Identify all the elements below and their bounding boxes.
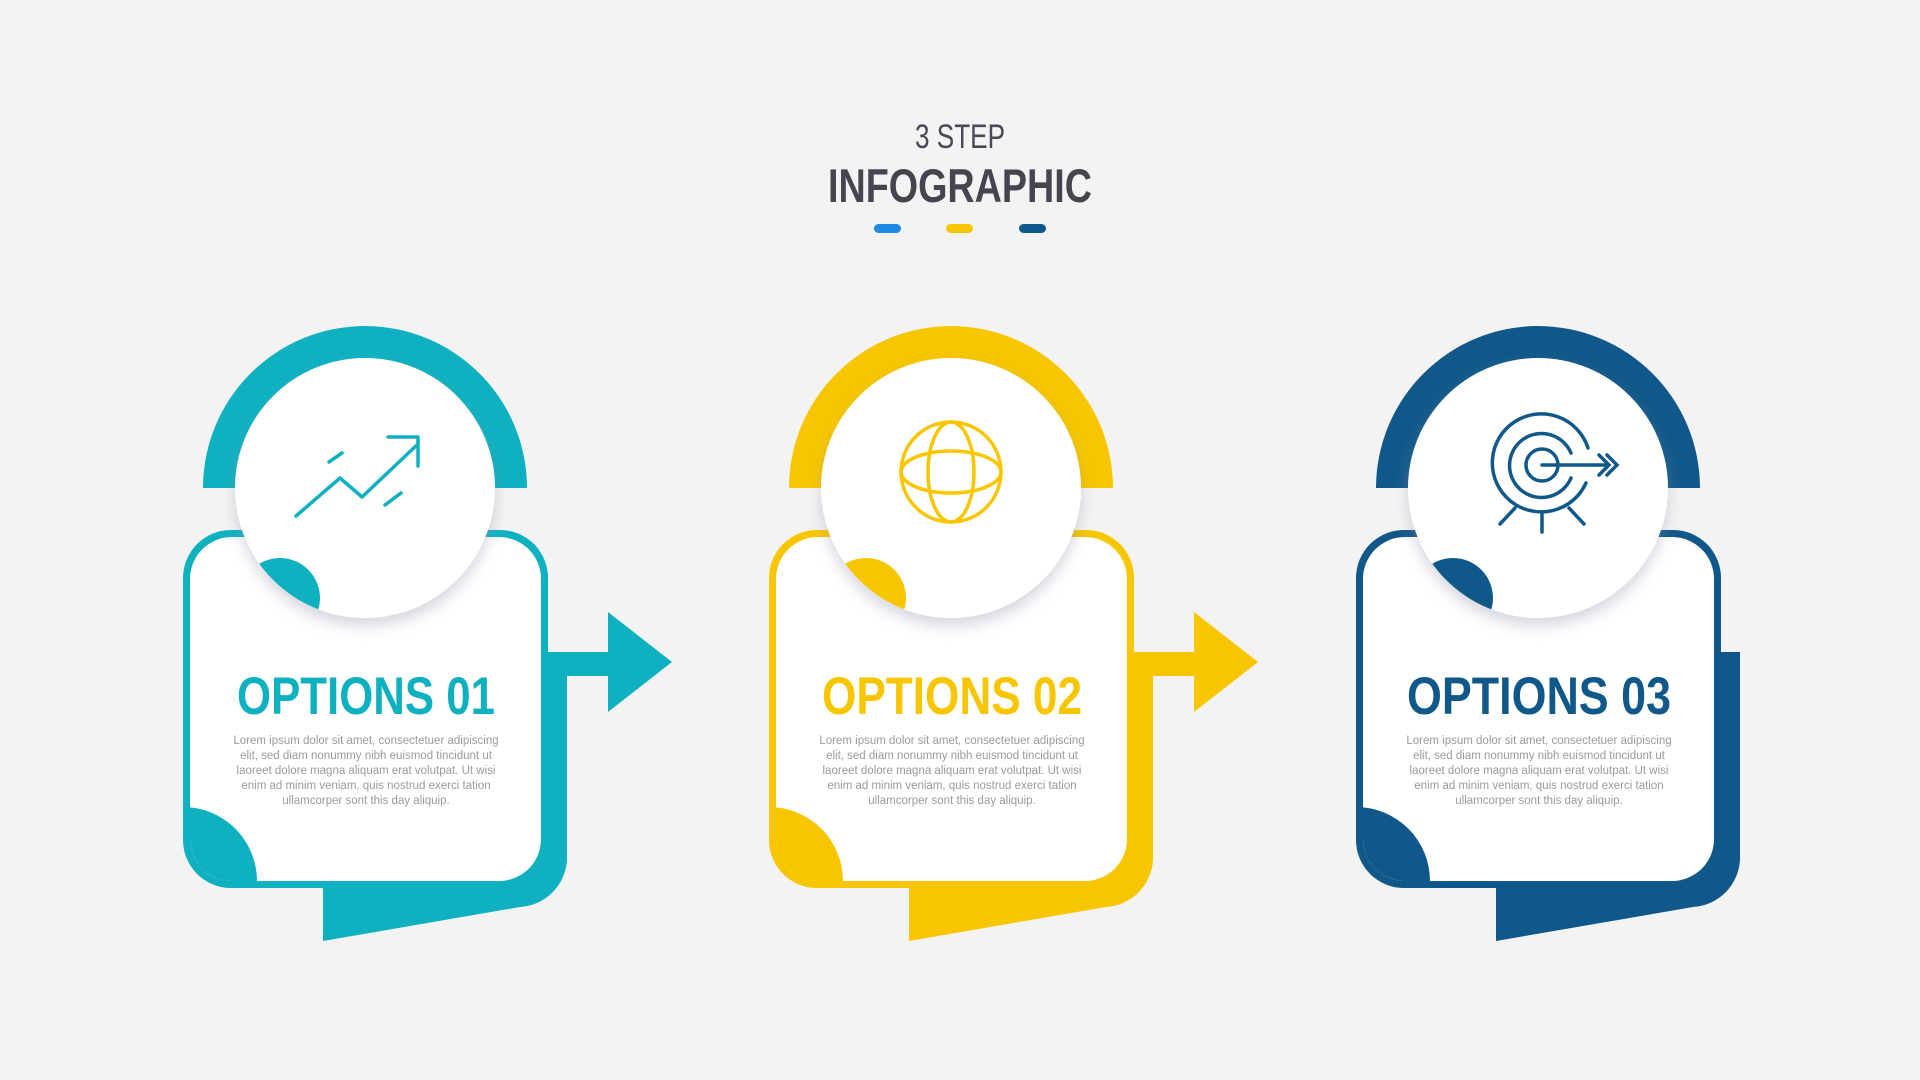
title (828, 118, 1092, 212)
text block: Lorem ipsum dolor sit amet, consectetuer adipiscing (1406, 735, 1672, 747)
arrow (540, 612, 672, 712)
text block: Lorem ipsum dolor sit amet, consectetuer adipiscing (233, 735, 499, 747)
text block: ullamcorper sont this day aliquip. (868, 795, 1036, 807)
title: INFOGRAPHIC (828, 159, 1092, 212)
text block: ullamcorper sont this day aliquip. (282, 795, 450, 807)
title dashes (874, 224, 1046, 233)
text block: elit, sed diam nonummy nibh euismod tincidunt ut (1413, 750, 1666, 762)
heading: OPTIONS 02 (822, 667, 1082, 726)
heading: OPTIONS 03 (1407, 667, 1671, 726)
text block: enim ad minim veniam, quis nostrud exerci tation (827, 780, 1077, 792)
text block: laoreet dolore magna aliquam erat volutpat. Ut wisi (237, 765, 495, 777)
panel: options 01 (183, 326, 672, 941)
text block (819, 735, 1085, 807)
text block (233, 735, 499, 807)
arrow (1126, 612, 1258, 712)
text block: Lorem ipsum dolor sit amet, consectetuer adipiscing (819, 735, 1085, 747)
text block: enim ad minim veniam, quis nostrud exerci tation (1414, 780, 1664, 792)
text block: laoreet dolore magna aliquam erat volutpat. Ut wisi (1410, 765, 1668, 777)
icon: target (1492, 414, 1617, 532)
text block: elit, sed diam nonummy nibh euismod tincidunt ut (240, 750, 493, 762)
icon: trend arrow (296, 437, 418, 516)
panel: options 03 (1356, 326, 1740, 941)
text block (1406, 735, 1672, 807)
heading: OPTIONS 01 (237, 667, 495, 726)
panel: options 02 (769, 326, 1258, 941)
icon: globe (901, 422, 1001, 522)
text block: elit, sed diam nonummy nibh euismod tincidunt ut (826, 750, 1079, 762)
text block: enim ad minim veniam, quis nostrud exerci tation (241, 780, 491, 792)
text block: ullamcorper sont this day aliquip. (1455, 795, 1623, 807)
title: 3 STEP (915, 118, 1005, 156)
text block: laoreet dolore magna aliquam erat volutpat. Ut wisi (823, 765, 1081, 777)
